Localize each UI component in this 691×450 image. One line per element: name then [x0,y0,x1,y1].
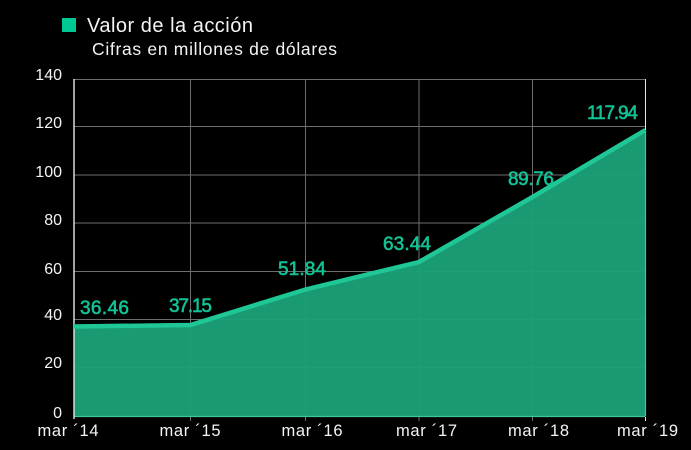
right axis [644,79,646,421]
legend [62,15,337,59]
area fill [74,130,646,416]
y axis labels: 40 [44,307,62,324]
x axis labels: mar ´17 [396,422,457,440]
y axis labels: 140 [35,67,62,84]
x axis labels: mar ´18 [508,422,569,440]
y axis labels: 60 [44,261,62,278]
x axis labels: mar ´19 [617,422,678,440]
value labels: 51.84 [278,259,326,280]
value labels: 63.44 [383,234,431,255]
subtitle: Cifras en millones de dólares [92,39,337,59]
x axis labels: mar ´16 [282,422,342,440]
area chart [35,67,678,440]
value labels: 37.15 [169,296,212,317]
icon: legend swatch [62,18,76,32]
y axis labels [35,67,62,422]
gridlines [74,79,645,421]
value labels: 36.46 [80,298,129,319]
y axis labels: 80 [44,212,62,229]
y axis labels: 100 [35,164,62,181]
value labels: 117.94 [587,103,638,124]
x axis labels [38,422,678,440]
baseline and right edge [74,132,646,416]
y axis labels: 0 [53,405,62,422]
y axis [73,79,75,419]
x axis labels: mar ´14 [38,422,98,440]
legend title: Valor de la acción [87,15,253,37]
y axis labels: 120 [35,115,62,132]
value line [74,130,646,326]
value labels: 89.76 [508,169,554,190]
x axis labels: mar ´15 [160,422,220,440]
value labels [80,103,638,319]
y axis labels: 20 [44,355,62,372]
